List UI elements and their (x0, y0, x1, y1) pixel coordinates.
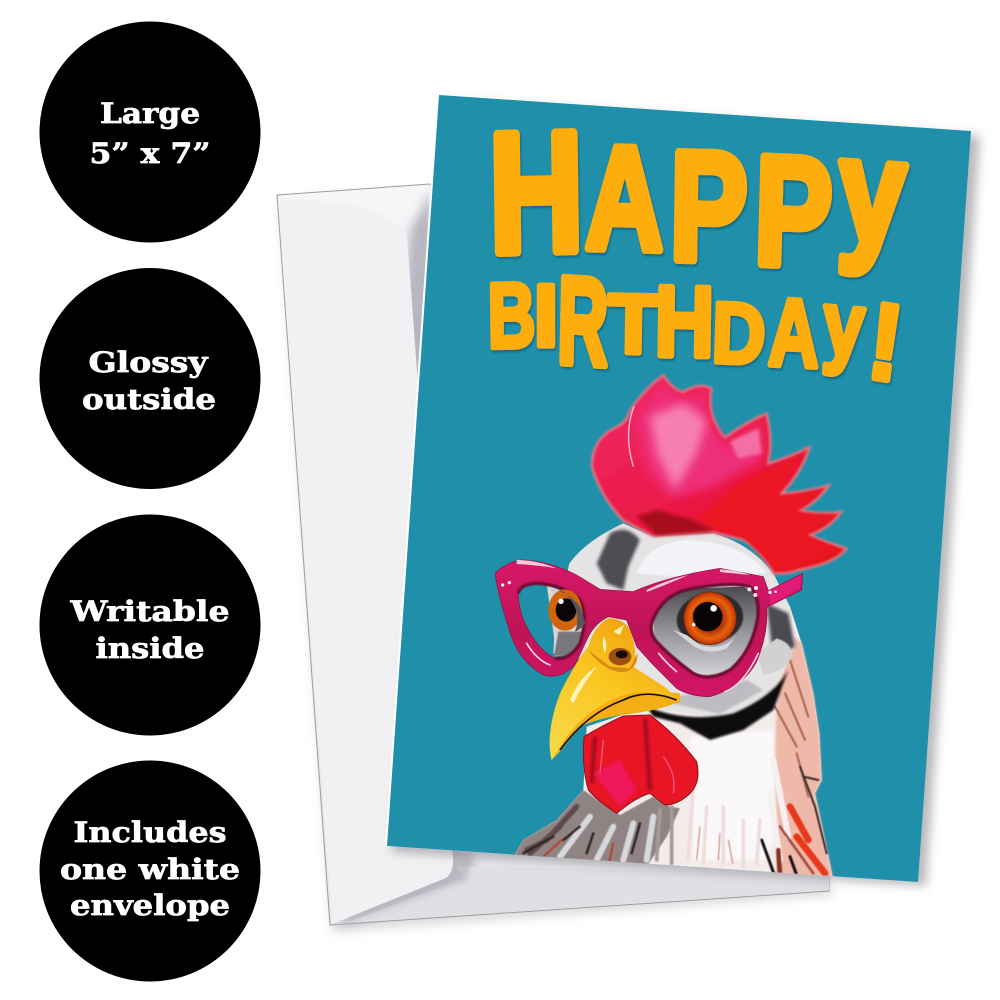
heading: BIRTHDAY!: I (533, 266, 559, 365)
badge: Includes one white envelope: Includes (74, 816, 226, 849)
badge: Writable inside: Writable (69, 595, 230, 628)
heading: HAPPY: A (585, 116, 665, 282)
heading: BIRTHDAY!: ! (862, 280, 909, 405)
heading: HAPPY: H (488, 97, 584, 289)
eye: left (548, 589, 585, 632)
heading: BIRTHDAY!: T (607, 277, 660, 371)
heading: BIRTHDAY!: H (654, 266, 715, 378)
heading: HAPPY: y (835, 105, 909, 277)
badge: Writable inside: inside (96, 632, 204, 665)
badge: Large 5 x 7 (40, 22, 260, 242)
heading: BIRTHDAY!: A (767, 278, 820, 388)
wattle (583, 715, 698, 813)
badge: Includes one white envelope: envelope (70, 889, 230, 922)
heading: BIRTHDAY! (487, 252, 909, 405)
rooster head (553, 523, 795, 740)
left lens area: cheek seen through lens (546, 586, 582, 657)
badge: Glossy outside: Glossy (88, 346, 208, 379)
eye: right (673, 589, 747, 652)
heading: HAPPY: P (752, 124, 834, 301)
heading: BIRTHDAY!: D (711, 284, 767, 382)
envelope (277, 184, 835, 932)
badge: Includes one white envelope (40, 760, 260, 982)
comb (592, 375, 847, 574)
badge: Glossy outside: outside (82, 383, 216, 416)
badge: Includes one white envelope: one white (60, 853, 240, 886)
glasses (495, 560, 803, 697)
greeting card (385, 94, 971, 882)
badge: Large 5 x 7: 5” x 7” (90, 137, 210, 170)
right lens skin (653, 587, 758, 675)
heading: HAPPY: P (669, 120, 748, 295)
frame (495, 560, 803, 697)
heading: BIRTHDAY!: B (487, 264, 536, 367)
heading: BIRTHDAY!: y (820, 271, 867, 378)
card shadow (392, 100, 980, 886)
illustration: rooster wearing glasses (495, 375, 847, 880)
heading: HAPPY (488, 97, 909, 301)
badge: Glossy outside (40, 268, 260, 489)
beak (550, 618, 680, 760)
heading: BIRTHDAY!: R (556, 252, 609, 393)
rooster neck feathers (513, 607, 833, 880)
badge: Large 5 x 7: Large (100, 97, 200, 130)
badge: Writable inside (40, 514, 260, 736)
